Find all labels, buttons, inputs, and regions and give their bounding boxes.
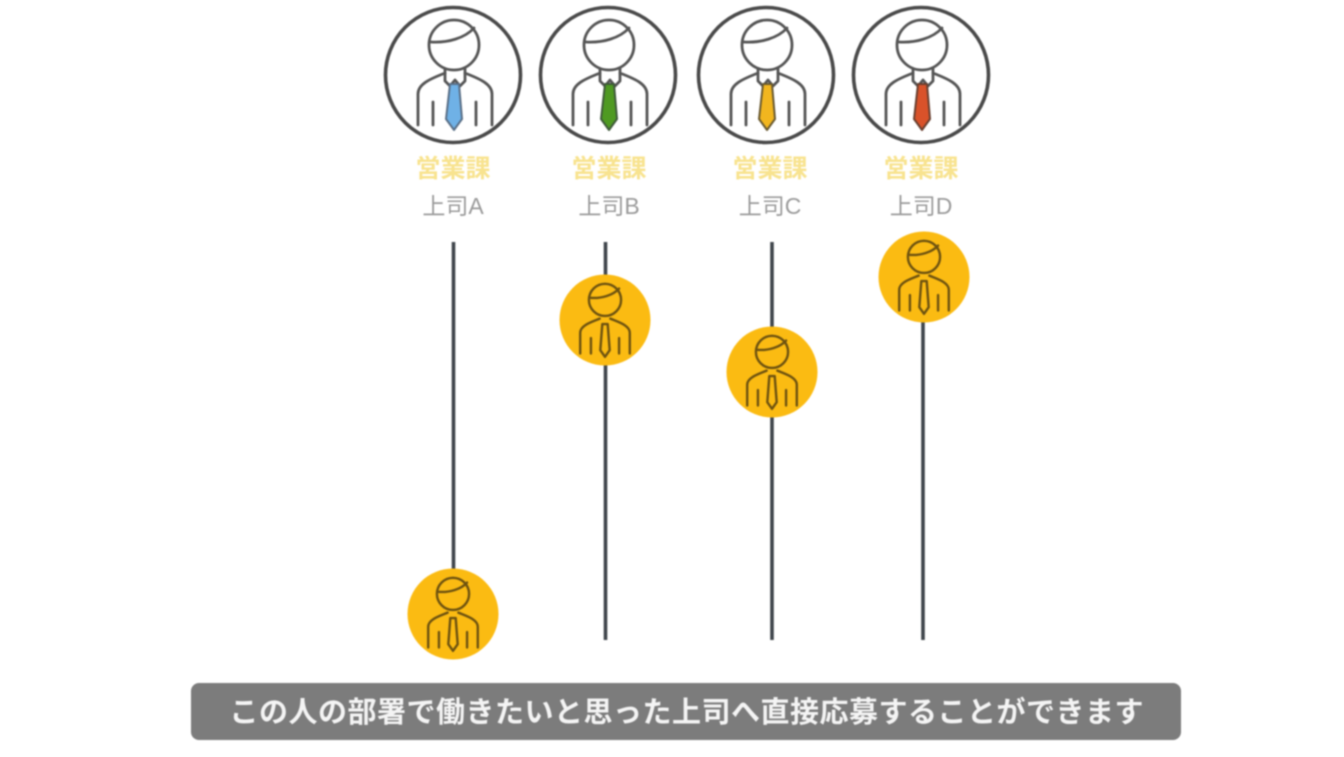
label: boss D: 営業課 bbox=[883, 155, 959, 183]
label: boss C: 営業課 bbox=[732, 155, 808, 183]
marker: applicant on line B bbox=[560, 274, 650, 366]
label: boss A: 営業課 bbox=[415, 155, 491, 183]
icon: boss A with blue tie bbox=[386, 8, 520, 142]
marker: applicant on line D bbox=[878, 232, 970, 322]
label: boss D: 上司D bbox=[890, 193, 952, 219]
icon: boss C with yellow tie bbox=[698, 8, 834, 142]
label: boss A bbox=[415, 155, 491, 219]
marker: applicant on line A bbox=[408, 568, 498, 660]
icon: boss D with red tie bbox=[854, 8, 988, 142]
timeline line: A bbox=[452, 242, 455, 575]
caption text: この人の部署で働きたいと思った上司へ直接応募することができます bbox=[230, 695, 1144, 729]
icon: boss B with green tie bbox=[540, 8, 676, 142]
marker: applicant on line C bbox=[726, 326, 818, 418]
timeline line: D bbox=[921, 300, 925, 640]
label: boss B bbox=[571, 155, 647, 219]
caption banner bbox=[191, 683, 1181, 740]
label: boss B: 営業課 bbox=[571, 155, 647, 183]
label: boss C bbox=[732, 155, 808, 219]
label: boss D bbox=[883, 155, 959, 219]
timeline line: C bbox=[770, 242, 774, 640]
label: boss A: 上司A bbox=[422, 193, 484, 219]
label: boss B: 上司B bbox=[578, 193, 640, 219]
timeline line: B bbox=[604, 242, 607, 640]
label: boss C: 上司C bbox=[739, 193, 801, 219]
